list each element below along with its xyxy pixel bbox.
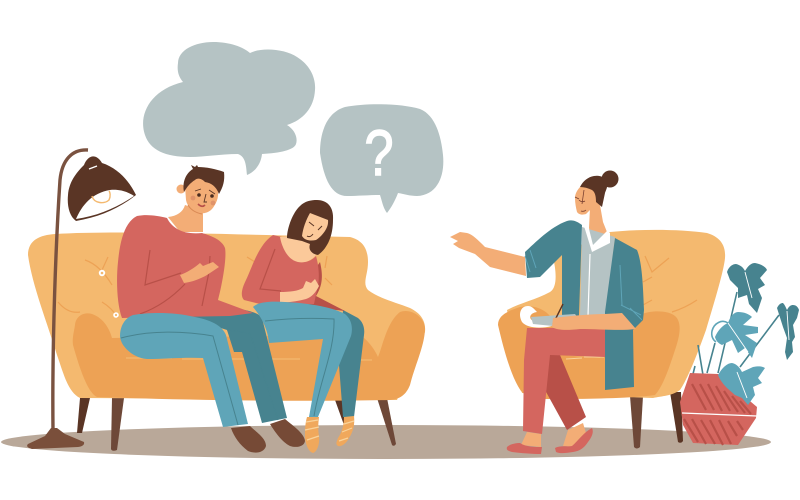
sofa seat and arms — [73, 311, 425, 401]
man face — [185, 177, 218, 213]
therapist pen — [553, 304, 563, 324]
armchair legs — [670, 392, 683, 443]
man near leg — [120, 313, 248, 427]
therapist far foot — [563, 423, 586, 447]
sofa — [28, 232, 425, 451]
woman arm and hand — [280, 279, 319, 302]
lamp stem — [53, 150, 88, 430]
speech bubble: man — [143, 42, 315, 175]
man facial features — [188, 189, 215, 214]
woman neck and chest — [280, 235, 316, 262]
woman sweater back — [290, 262, 345, 311]
man far leg — [170, 307, 287, 423]
woman sweater — [242, 235, 319, 304]
armchair back — [507, 230, 725, 398]
therapist notebook — [531, 314, 578, 326]
woman sweater folds — [260, 249, 281, 291]
leaf: top teal — [727, 263, 767, 313]
man near shoe — [231, 426, 266, 453]
lamp base — [27, 428, 84, 449]
leaf: right teal — [777, 303, 799, 360]
man — [117, 165, 305, 453]
therapist outstretched arm — [450, 232, 526, 276]
man hair — [183, 165, 224, 194]
plant stems — [693, 292, 779, 375]
woman hair — [287, 200, 333, 255]
man sweater — [117, 215, 253, 318]
woman near sock — [305, 417, 319, 453]
woman face — [302, 213, 328, 241]
sofa back — [28, 232, 425, 400]
armchair seat and arms — [498, 306, 680, 399]
pot — [680, 373, 757, 445]
lamp shade — [68, 156, 136, 221]
floor shadow — [1, 425, 771, 459]
woman — [242, 200, 364, 453]
therapist far shoe — [555, 428, 593, 453]
therapist pants — [523, 328, 605, 434]
therapist hair — [580, 176, 607, 207]
woman near leg — [253, 302, 352, 417]
leaf: lower light — [718, 363, 765, 405]
man neck — [168, 205, 203, 232]
therapist far leg — [545, 355, 586, 430]
therapist lower arm — [552, 313, 636, 330]
woman leg seams — [265, 318, 334, 416]
therapist hair bun — [602, 170, 618, 188]
woman far sock — [336, 416, 354, 446]
sofa tufting — [58, 256, 332, 318]
therapist jacket — [525, 220, 644, 390]
woman facial features — [307, 222, 322, 237]
lamp — [27, 150, 136, 449]
lamp bulb — [92, 191, 110, 203]
therapist facial features — [575, 190, 586, 211]
therapist near foot — [521, 432, 541, 447]
leaf veins — [728, 272, 789, 398]
man ear — [176, 184, 186, 194]
therapist paper — [520, 306, 552, 328]
therapist — [450, 170, 644, 454]
man sweater folds — [140, 250, 210, 314]
question mark: ? — [364, 118, 394, 189]
leaf ring stem — [712, 321, 728, 342]
therapist neck — [589, 205, 607, 247]
plant and pot — [680, 263, 799, 445]
therapist shirt — [580, 227, 615, 316]
leaf: middle light — [715, 312, 758, 358]
therapist collar — [584, 225, 610, 252]
sock stripes — [305, 420, 354, 441]
woman far leg — [339, 310, 364, 417]
speech bubble: woman with question mark — [320, 104, 443, 213]
man leg seams — [121, 330, 278, 425]
therapist near shoe — [507, 443, 542, 454]
man far shoe — [270, 419, 305, 447]
therapist face — [575, 186, 600, 215]
man hand — [180, 262, 219, 283]
sofa legs — [77, 398, 396, 451]
therapist jacket details — [525, 250, 642, 320]
seat stitching — [126, 358, 372, 360]
sofa buttons — [99, 270, 119, 318]
armchair tufting — [643, 256, 697, 312]
lamp interior — [76, 190, 134, 219]
pot stripes — [684, 384, 751, 445]
armchair — [498, 230, 725, 448]
